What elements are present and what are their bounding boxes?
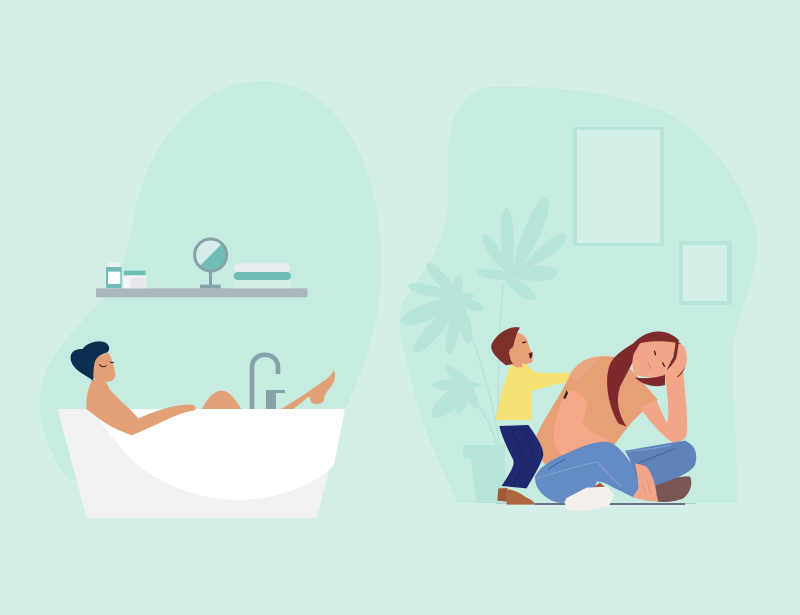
bottle xyxy=(106,262,122,288)
face xyxy=(632,341,675,377)
faucet xyxy=(252,355,285,410)
shirt xyxy=(496,363,569,420)
mother near leg xyxy=(535,442,638,503)
jar xyxy=(123,271,146,288)
upper plant leaves xyxy=(479,199,565,298)
bath scene xyxy=(57,239,345,518)
lower bodies xyxy=(497,425,696,510)
slipper xyxy=(566,487,613,510)
face xyxy=(92,353,115,382)
mother near arm xyxy=(553,391,610,457)
mother: head and raised arm xyxy=(607,331,687,442)
boy: head and shirt xyxy=(491,327,569,420)
mother far leg xyxy=(625,441,696,488)
jeans seams xyxy=(537,462,622,487)
lower hair lock xyxy=(635,375,665,386)
body and arm xyxy=(86,380,196,435)
lower plant leaves xyxy=(433,365,479,417)
eyes xyxy=(99,362,114,367)
shelf board xyxy=(96,288,307,297)
eye xyxy=(522,340,526,345)
plant pot xyxy=(463,445,505,503)
mother: torso and arm xyxy=(537,356,658,464)
boy shoes xyxy=(497,488,535,505)
blob: right background shape xyxy=(400,87,757,503)
hand xyxy=(665,343,687,379)
shelf with items xyxy=(96,239,307,297)
floor shadow xyxy=(496,503,696,505)
plant stems xyxy=(457,283,503,445)
upper and middle plant leaves xyxy=(402,199,565,352)
mirror xyxy=(195,239,227,288)
boy trousers xyxy=(499,425,543,488)
hair behind hand xyxy=(664,340,681,376)
neck and face xyxy=(508,333,533,367)
bathtub xyxy=(57,409,345,518)
mother far foot xyxy=(655,476,691,502)
shoe behind leg xyxy=(592,483,611,492)
eyes xyxy=(654,351,665,367)
mother torso xyxy=(537,356,658,464)
ear xyxy=(509,348,518,358)
back hair xyxy=(607,331,679,427)
mouth xyxy=(529,352,533,359)
sleeve accent xyxy=(563,390,568,399)
raised arm xyxy=(640,370,687,442)
raised leg xyxy=(279,370,335,411)
shoulder shade xyxy=(570,357,602,382)
middle plant leaves xyxy=(402,265,482,352)
hair xyxy=(71,341,109,381)
knee xyxy=(201,391,242,410)
mouth xyxy=(647,363,650,369)
picture frame large xyxy=(573,127,664,246)
bathing woman xyxy=(71,341,196,435)
picture frame small xyxy=(679,241,732,305)
towels xyxy=(234,263,291,288)
mother near hand xyxy=(633,463,658,502)
blob: left background shape xyxy=(40,81,381,480)
hair xyxy=(491,327,520,365)
